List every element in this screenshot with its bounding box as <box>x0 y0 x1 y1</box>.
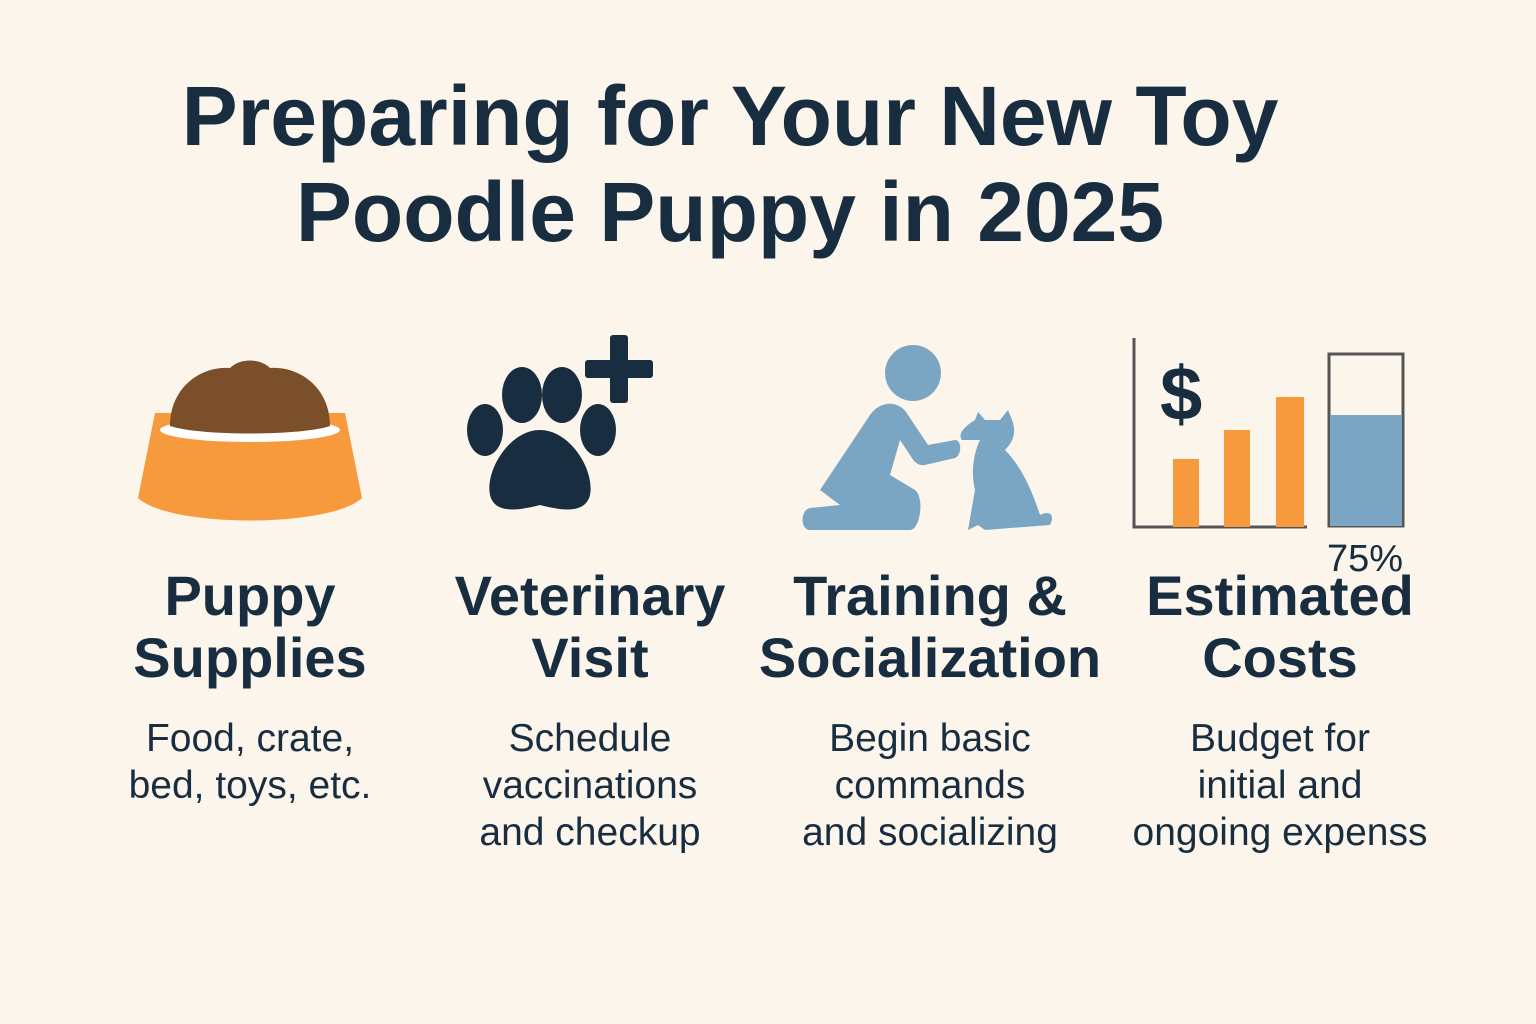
icon: cost chart: $ <box>1160 352 1202 437</box>
text block <box>1133 717 1427 854</box>
heading: Supplies <box>133 626 367 689</box>
heading: Visit <box>531 626 649 689</box>
title: Poodle Puppy in 2025 <box>296 165 1164 259</box>
heading: Veterinary <box>455 564 725 627</box>
heading <box>455 564 726 689</box>
panel: training <box>759 564 1101 854</box>
heading: Socialization <box>759 626 1101 689</box>
heading: Training & <box>793 564 1067 627</box>
icon: person with dog <box>802 345 1052 530</box>
heading <box>1146 564 1414 689</box>
heading: Costs <box>1202 626 1358 689</box>
label: 75%: 75% <box>1327 538 1403 580</box>
text block: commands <box>835 764 1025 807</box>
heading <box>133 564 367 689</box>
heading: Estimated <box>1146 564 1414 627</box>
text block <box>479 717 701 854</box>
heading: Puppy <box>164 564 336 627</box>
heading <box>759 564 1101 689</box>
icon: paw with plus <box>467 335 653 510</box>
text block: Begin basic <box>829 717 1031 760</box>
panel: estimated costs <box>1133 564 1427 854</box>
title: Preparing for Your New Toy <box>182 69 1278 163</box>
panel: veterinary visit <box>455 564 726 854</box>
text block: ongoing expenss <box>1133 811 1427 854</box>
text block: and checkup <box>479 811 701 854</box>
text block: Schedule <box>509 717 671 760</box>
icon: cost chart <box>1132 338 1404 528</box>
panel: puppy supplies <box>129 564 371 807</box>
title <box>182 69 1278 259</box>
text block: Budget for <box>1190 717 1370 760</box>
text block <box>802 717 1058 854</box>
text block <box>129 717 371 807</box>
text block: initial and <box>1198 764 1362 807</box>
icon: food bowl <box>138 360 362 520</box>
text block: and socializing <box>802 811 1058 854</box>
text block: vaccinations <box>483 764 697 807</box>
text block: Food, crate, <box>146 717 354 760</box>
text block: bed, toys, etc. <box>129 764 371 807</box>
